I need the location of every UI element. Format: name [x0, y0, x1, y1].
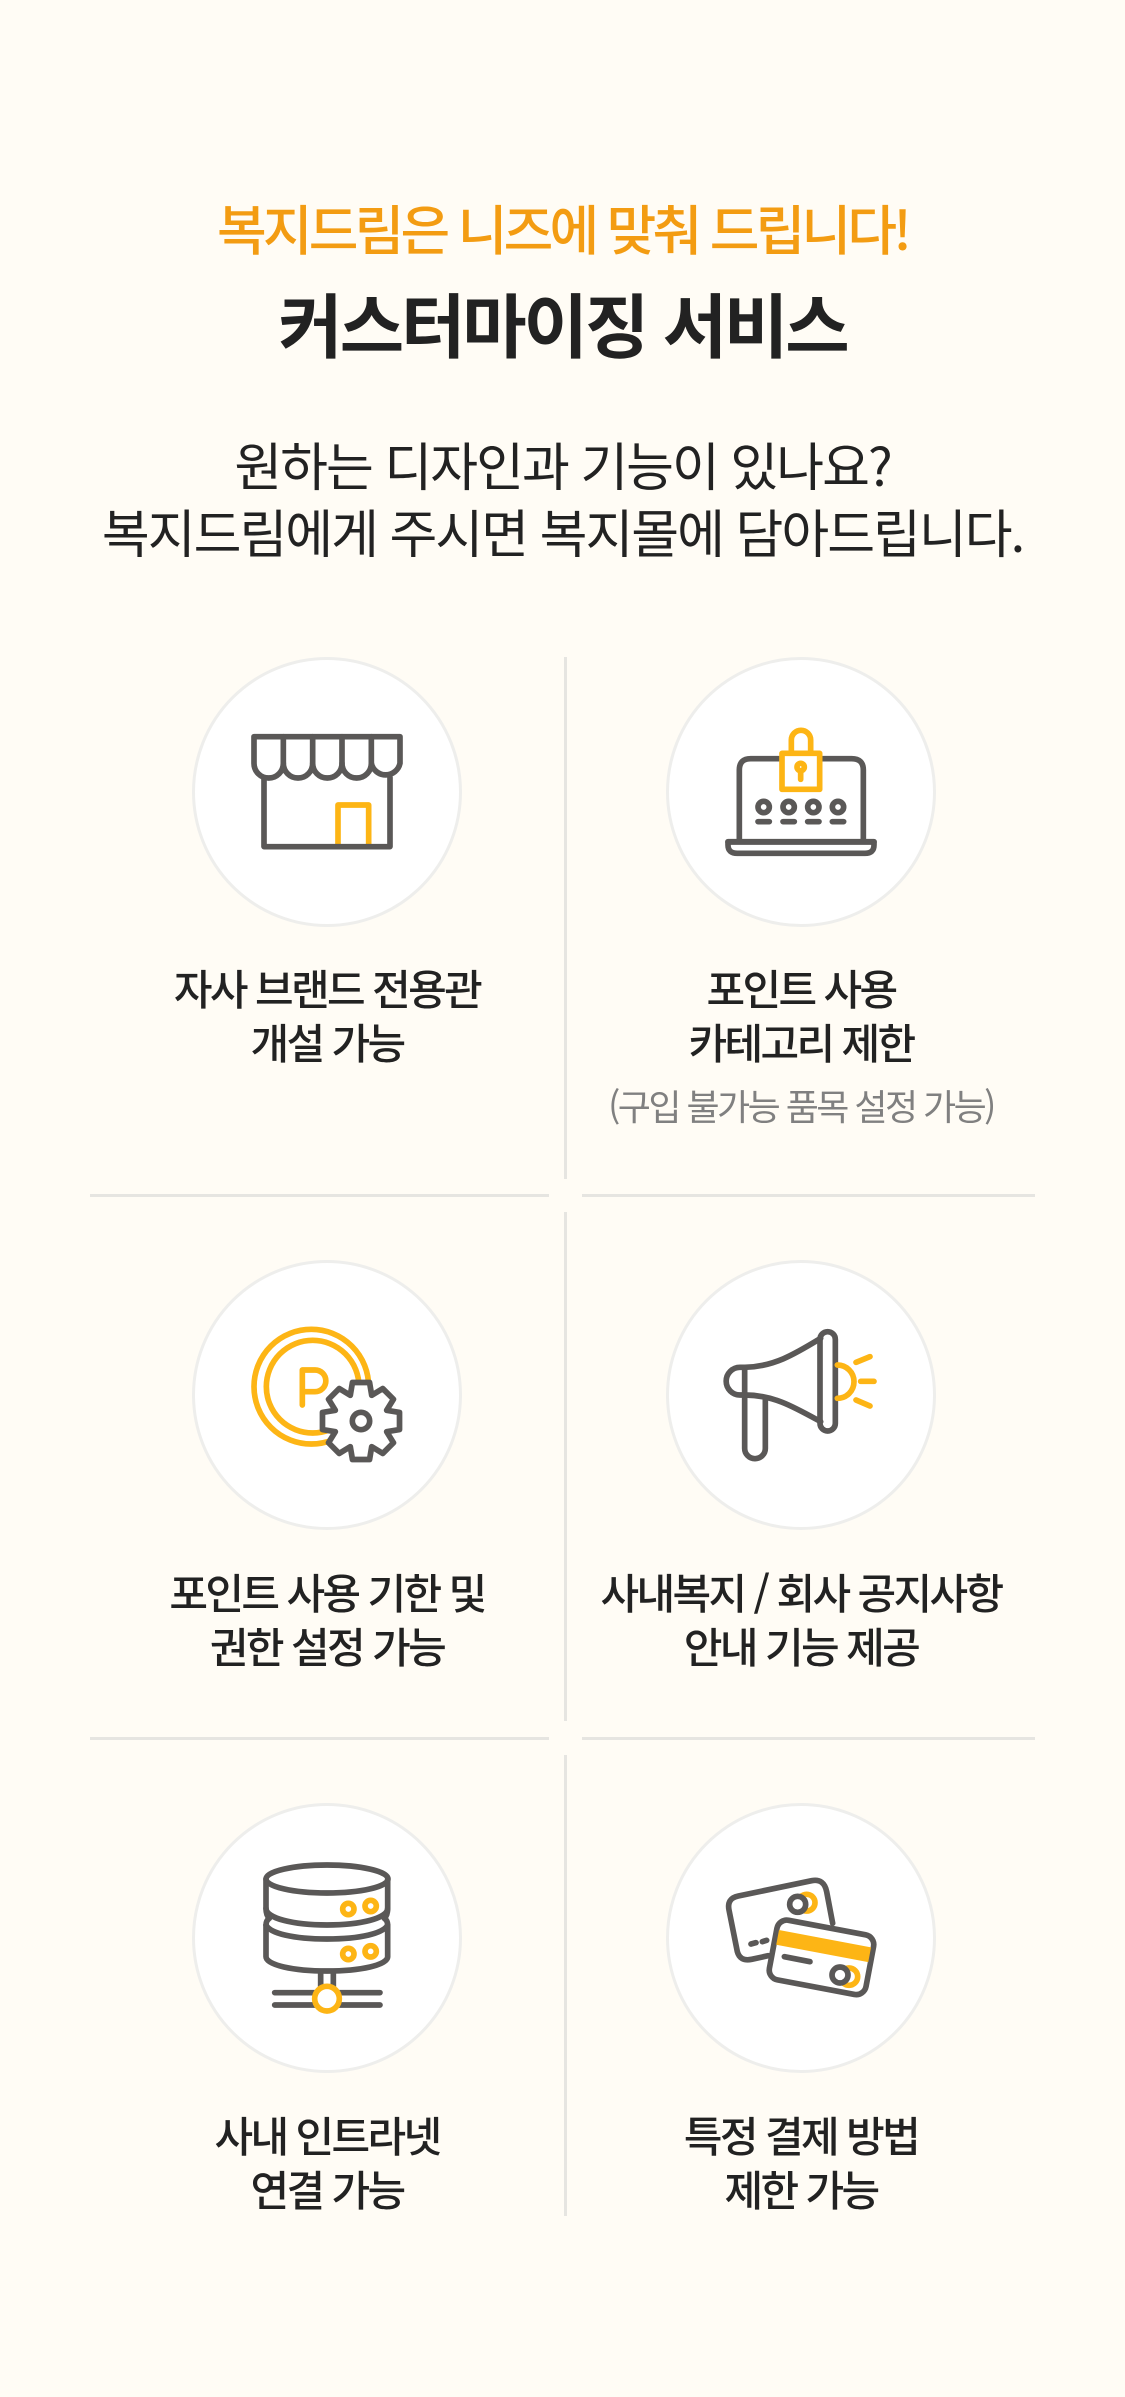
panel: point category limit: [608, 657, 994, 1131]
label: [169, 1561, 485, 1676]
label: [174, 957, 482, 1072]
label: [688, 957, 915, 1072]
icon: point coin with gear: [251, 1326, 402, 1462]
title: 커스터마이징 서비스: [278, 272, 847, 373]
intro text: 원하는 디자인과 기능이 있나요?: [234, 426, 891, 501]
panel: point expiry: [169, 1260, 485, 1676]
icon circle: [666, 657, 936, 927]
label: 자사 브랜드 전용관: [174, 957, 480, 1018]
label: 제한 가능: [724, 2158, 878, 2219]
label: [684, 2104, 918, 2219]
label: [600, 1561, 1003, 1676]
label: 개설 가능: [250, 1011, 404, 1072]
icon circle: [666, 1803, 936, 2073]
icon circle: [192, 1803, 462, 2073]
label: 안내 기능 제공: [684, 1615, 918, 1676]
panel: payment limit: [666, 1803, 936, 2219]
label: 포인트 사용: [706, 957, 896, 1018]
eyebrow heading: 복지드림은 니즈에 맞춰 드립니다!: [217, 187, 908, 266]
intro text: [102, 426, 1023, 568]
icon: laptop with lock: [725, 728, 877, 856]
label: 사내 인트라넷: [214, 2104, 440, 2165]
label: 카테고리 제한: [688, 1011, 914, 1072]
icon circle: [192, 657, 462, 927]
intro text: 복지드림에게 주시면 복지몰에 담아드립니다.: [102, 493, 1023, 568]
label: [214, 2104, 440, 2219]
icon circle: [666, 1260, 936, 1530]
label: 포인트 사용 기한 및: [169, 1561, 485, 1622]
panel: brand store: [174, 657, 482, 1072]
icon: storefront: [251, 734, 403, 850]
note: (구입 불가능 품목 설정 가능): [608, 1079, 994, 1131]
icon: database server: [263, 1862, 391, 2014]
label: 사내복지 / 회사 공지사항: [600, 1561, 1002, 1622]
label: 특정 결제 방법: [684, 2104, 918, 2165]
label: 권한 설정 가능: [210, 1615, 444, 1676]
icon circle: [192, 1260, 462, 1530]
icon: credit cards: [726, 1878, 877, 1998]
label: 연결 가능: [250, 2158, 404, 2219]
panel: notices: [600, 1260, 1003, 1676]
panel: intranet: [192, 1803, 462, 2219]
icon: megaphone: [723, 1328, 877, 1462]
